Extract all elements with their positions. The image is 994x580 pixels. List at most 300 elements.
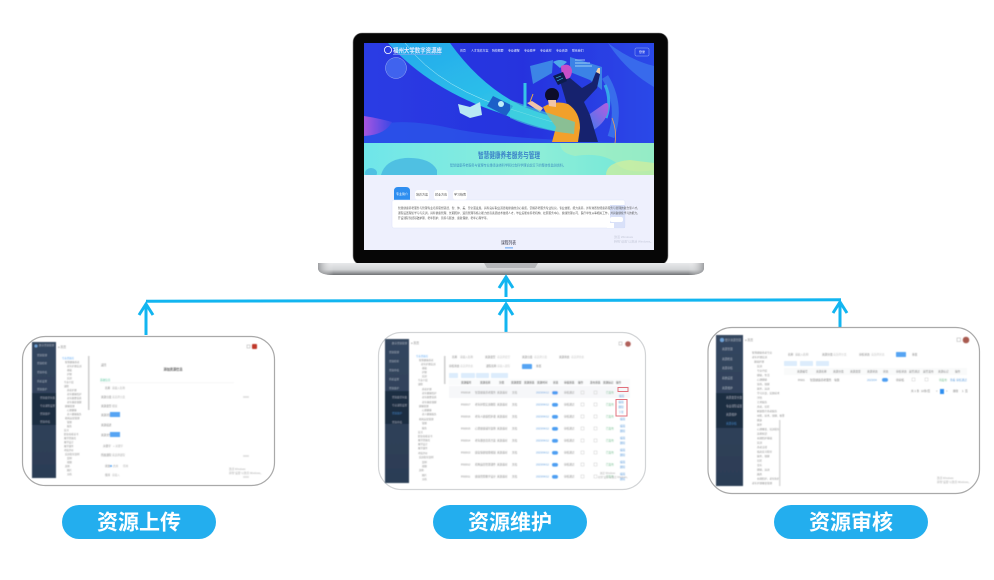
upload form: 返回 bbox=[101, 363, 107, 367]
directory tree: 教学设计 bbox=[418, 442, 428, 446]
directory tree: 营养、保健 bbox=[757, 382, 770, 386]
search filters: 资源分类 bbox=[522, 355, 533, 359]
navigation menu: 专业素材 bbox=[540, 48, 552, 52]
review table: 审核状态 bbox=[896, 370, 907, 374]
directory tree: 养老、社区 bbox=[757, 404, 770, 408]
table rows: 文档 bbox=[512, 474, 518, 478]
directory tree: 老年膳食营养 bbox=[67, 396, 82, 400]
upload form: 添加资源信息 bbox=[163, 366, 183, 372]
directory tree: 职业技能证书 bbox=[64, 432, 79, 436]
table rows: 审核通过 bbox=[564, 462, 575, 466]
search filters: 重置 bbox=[912, 352, 918, 356]
search filters: 请选择状态 bbox=[871, 352, 885, 356]
band subtitle: 智慧健康养老服务与管理专业秉承该类科学和社会科学理论前沿下的整体性监测资料。 bbox=[450, 162, 566, 168]
table rows: 文档 bbox=[512, 426, 518, 430]
panel: resource review bbox=[708, 328, 980, 494]
top bar: ≡ 首页 bbox=[745, 338, 753, 342]
table rows: 编辑 bbox=[620, 448, 626, 452]
upload form: 请输入 bbox=[112, 473, 120, 477]
directory tree: 图片 bbox=[422, 473, 427, 477]
directory tree: 教学资源库 bbox=[64, 436, 77, 440]
table rows: 已发布 bbox=[606, 438, 614, 442]
directory tree: 心理健康 bbox=[757, 378, 768, 382]
tabs: 就业方向 bbox=[435, 192, 447, 196]
table rows: 编辑 bbox=[618, 400, 624, 404]
connector arrows bbox=[139, 277, 847, 335]
table header: 审核状态 bbox=[564, 380, 575, 384]
directory tree: 教学课件 bbox=[64, 444, 74, 448]
table header bbox=[449, 379, 630, 385]
logo and site name: 福州大学数字资源库 bbox=[393, 46, 442, 54]
directory tree: 案例 bbox=[422, 460, 427, 464]
sidebar: 资源管理 bbox=[37, 353, 48, 357]
table rows: 资源素材 bbox=[497, 438, 508, 442]
directory tree: 艺术服务 bbox=[757, 400, 768, 404]
windows watermark: 转到"设置"以激活 Windows。 bbox=[229, 471, 263, 475]
directory tree: 社区 bbox=[757, 458, 763, 462]
introduction card: 开设课程包括基础护理、老年照护、营养与膳食、康复保健、老年心理学等。 bbox=[398, 216, 489, 220]
table rows: 删除 bbox=[620, 441, 626, 445]
table rows: 已发布 bbox=[606, 414, 614, 418]
directory tree: 实训 bbox=[757, 364, 763, 368]
search filters: 请选择状态 bbox=[571, 355, 584, 359]
upload form: 排序 bbox=[105, 473, 111, 477]
directory tree: 中医、技术、保健、推拿 bbox=[757, 414, 785, 418]
table rows: 审核通过 bbox=[564, 390, 575, 394]
search filters: 请选择类型 bbox=[497, 355, 510, 359]
arrow: resource maintenance lower bbox=[499, 304, 513, 335]
search filters: 名称 bbox=[788, 352, 794, 356]
tabs: 专业简介 bbox=[396, 191, 408, 196]
sidebar: 资源管理 bbox=[722, 347, 733, 351]
sidebar: 数字资源管理 bbox=[725, 338, 741, 342]
table rows: 删除 bbox=[618, 405, 624, 409]
laptop bbox=[318, 33, 704, 275]
upload form: 资源类型 bbox=[101, 404, 112, 408]
sidebar: 资源维护 bbox=[722, 386, 733, 390]
directory tree: 智慧健康养老专业 bbox=[752, 350, 773, 354]
search filters: 请输入名称 bbox=[460, 355, 473, 359]
table rows: 审核通过 bbox=[564, 402, 575, 406]
sidebar: 资源维护 bbox=[392, 411, 403, 415]
action buttons bbox=[449, 373, 508, 378]
sidebar: 系统设置 bbox=[722, 376, 733, 380]
upload form: + 关键字 bbox=[113, 444, 123, 448]
table rows: 2023/04/12 bbox=[536, 414, 550, 418]
table header: 资源类型 bbox=[511, 380, 522, 384]
review table: 资源编号 bbox=[797, 370, 808, 374]
pagination: 前往 bbox=[953, 389, 959, 393]
navigation menu: 联系我们 bbox=[572, 48, 584, 52]
introduction card bbox=[392, 200, 640, 228]
directory tree: 实训 bbox=[757, 440, 763, 444]
directory tree: 长期照护、老年防护 bbox=[757, 476, 780, 480]
search filters: 请选择分类 bbox=[534, 355, 547, 359]
directory tree: 管理 bbox=[422, 421, 427, 425]
band heading: 智慧健康养老服务与管理 bbox=[478, 150, 540, 160]
table rows: 资源素材 bbox=[497, 402, 508, 406]
sidebar: 资源管理 bbox=[389, 350, 400, 354]
login button: 登录 bbox=[639, 49, 645, 54]
top bar: ≡ 首页 bbox=[411, 341, 419, 345]
table rows: 2023/04/12 bbox=[536, 426, 550, 430]
hero banner bbox=[364, 43, 654, 143]
directory tree: 考核评价 bbox=[418, 451, 428, 455]
table rows bbox=[449, 386, 630, 481]
table rows: 资源素材 bbox=[497, 474, 508, 478]
sidebar: 资源维护 bbox=[726, 412, 737, 416]
directory tree: 实训指导案例 bbox=[419, 455, 434, 459]
directory tree: 管理 bbox=[67, 420, 72, 424]
directory tree: 图片 bbox=[67, 468, 72, 472]
sidebar: 资源维护 bbox=[37, 387, 48, 391]
directory tree: 老年康复保健 bbox=[422, 400, 437, 404]
search filters: 重置 bbox=[536, 364, 542, 368]
upload form: 基础信息 bbox=[100, 378, 111, 382]
sidebar: 专业课程设置 bbox=[392, 403, 408, 407]
directory tree: 老年康复保健 bbox=[67, 400, 82, 404]
table rows: 审核通过 bbox=[564, 438, 575, 442]
directory tree: 课程 bbox=[418, 382, 423, 386]
directory tree: 课程 bbox=[64, 384, 69, 388]
review table: 待审核 bbox=[896, 378, 904, 382]
windows watermark bbox=[614, 236, 652, 243]
search filters: 请输入名称 bbox=[795, 352, 809, 356]
table header: 资源标记 bbox=[603, 380, 614, 384]
panel: resource maintenance bbox=[378, 332, 646, 490]
windows watermark: 激活 Windows bbox=[229, 467, 246, 471]
upload form: 所属课程 bbox=[101, 453, 112, 457]
navigation menu: 人才培养方案 bbox=[471, 48, 488, 52]
directory tree: 考核评价 bbox=[64, 448, 74, 452]
directory tree: 视频 bbox=[67, 460, 72, 464]
sidebar: 数字资源管理 bbox=[39, 343, 55, 347]
windows watermark bbox=[229, 467, 263, 475]
directory tree: 老年护理实训 bbox=[67, 364, 82, 368]
introduction section background bbox=[364, 175, 654, 250]
navigation menu: 院校概要 bbox=[492, 48, 504, 52]
review table bbox=[784, 368, 967, 382]
tabs: 培养方案 bbox=[416, 192, 428, 196]
upload form: 请选择课程 bbox=[112, 453, 125, 457]
table rows: 心理健康辅导案例 bbox=[475, 426, 496, 430]
panel: resource upload bbox=[22, 336, 274, 486]
upload form: 资源描述 bbox=[101, 423, 112, 427]
upload form: 关键字 bbox=[103, 444, 111, 448]
translucent banner across figures bbox=[510, 100, 575, 134]
search filters: 资源状态 bbox=[559, 355, 570, 359]
table rows: RS0015 bbox=[461, 426, 471, 430]
table rows: 编辑 bbox=[620, 472, 626, 476]
table header: 状态 bbox=[553, 380, 559, 384]
sidebar bbox=[32, 342, 56, 478]
table rows: 资源素材 bbox=[497, 450, 508, 454]
sidebar: 数字资源管理 bbox=[392, 341, 408, 345]
action buttons bbox=[784, 361, 829, 366]
directory tree: 机构运营管理 bbox=[419, 417, 434, 421]
arrow: resource maintenance upper bbox=[499, 277, 513, 297]
directory tree: 老年健康照护 bbox=[67, 392, 82, 396]
upload form: 名称 bbox=[105, 386, 111, 390]
directory tree: 教学课件 bbox=[418, 446, 428, 450]
table rows: 已发布 bbox=[606, 474, 614, 478]
top bar bbox=[745, 337, 969, 343]
directory tree: 职业技能证书 bbox=[418, 434, 433, 438]
review table: 资源分类 bbox=[833, 370, 844, 374]
windows watermark: 转到"设置"以激活 Windows。 bbox=[937, 480, 971, 484]
directory tree: 长期照护基础 bbox=[757, 436, 773, 440]
sidebar: 系统设置 bbox=[37, 379, 48, 383]
directory tree: 健身 bbox=[757, 418, 763, 422]
label: resource upload bbox=[62, 505, 216, 539]
search filters bbox=[788, 352, 918, 357]
upload form: 资源分类 bbox=[101, 395, 112, 399]
table rows: 机构运营管理课件 bbox=[475, 462, 496, 466]
directory tree: 老年护理教育管理 bbox=[752, 481, 773, 485]
windows watermark: 激活 Windows bbox=[937, 476, 954, 480]
sidebar: 资源维护 bbox=[389, 386, 400, 390]
windows watermark: 激活 Windows bbox=[614, 234, 634, 239]
table rows: 已发布 bbox=[606, 450, 614, 454]
course list heading bbox=[501, 240, 516, 248]
upload form: 停用 bbox=[123, 464, 129, 468]
review table: 是否发布 bbox=[923, 370, 934, 374]
figure: seated person in orange hoodie bbox=[527, 88, 580, 142]
sidebar: 专业课程设置 bbox=[40, 404, 56, 408]
directory tree: 音乐 bbox=[757, 463, 763, 467]
table rows: 删除 bbox=[620, 477, 626, 481]
sidebar: 资源维护 bbox=[40, 412, 51, 416]
sidebar: 资源审核 bbox=[392, 420, 403, 424]
pagination: 1 bbox=[962, 389, 964, 393]
sidebar: 资源检索 bbox=[37, 361, 48, 365]
review table: 资源类型 bbox=[850, 370, 861, 374]
directory tree: 老年护理实训 bbox=[421, 362, 436, 366]
table rows: 康复保健技能视频 bbox=[475, 450, 496, 454]
review table: 资源标记 bbox=[938, 370, 949, 374]
upload screenshot bbox=[32, 342, 263, 478]
label: resource review bbox=[774, 505, 928, 539]
directory tree: 家庭医疗养老服务 bbox=[757, 409, 778, 413]
directory tree: 案例 bbox=[67, 456, 72, 460]
table header: 资源名称 bbox=[480, 380, 491, 384]
windows watermark: 激活 Windows bbox=[600, 471, 616, 475]
table rows: 智慧健康养老服务 bbox=[475, 390, 496, 394]
directory tree: 专业介绍 bbox=[418, 378, 428, 382]
table header: 资源状态 bbox=[524, 380, 535, 384]
table rows: 编辑 bbox=[620, 436, 626, 440]
directory tree: 心理健康 bbox=[422, 408, 432, 412]
directory tree: 专业资源库 bbox=[62, 356, 75, 360]
table rows: RS0017 bbox=[461, 402, 471, 406]
table rows: 审核通过 bbox=[564, 474, 575, 478]
navigation menu: 专业教学 bbox=[524, 48, 536, 52]
review table: 查看 审核通过 bbox=[950, 378, 967, 382]
search filters bbox=[449, 355, 584, 369]
top bar: ≡ 首页 bbox=[58, 345, 66, 349]
pagination: 页 bbox=[965, 389, 968, 393]
laptop screen bbox=[364, 43, 654, 250]
table rows: 已发布 bbox=[606, 426, 614, 430]
review table: 状态 bbox=[883, 370, 889, 374]
video card bbox=[487, 96, 513, 116]
review table: RS01 bbox=[798, 378, 805, 382]
review table: 智慧健康养老服务 bbox=[810, 378, 832, 382]
directory tree: 健康管理 bbox=[65, 404, 75, 408]
figure: standing person bbox=[553, 65, 600, 142]
pagination: > bbox=[946, 389, 948, 393]
red highlight boxes bbox=[616, 388, 628, 416]
search filters: 审核状态 bbox=[859, 352, 870, 356]
login button bbox=[635, 48, 649, 56]
sidebar bbox=[716, 335, 743, 486]
directory tree: 老年护理实训 bbox=[752, 355, 768, 359]
sidebar: 资源检索 bbox=[722, 357, 733, 361]
directory tree: 基础 bbox=[67, 368, 72, 372]
search filters: 审核状态 bbox=[449, 364, 460, 368]
directory tree: 康复、运动 bbox=[757, 386, 770, 390]
directory tree: 服务 bbox=[67, 424, 72, 428]
table rows: 删除 bbox=[620, 465, 626, 469]
directory tree: 心理教育、培训指导 bbox=[757, 427, 780, 431]
directory tree: 养老法律 bbox=[757, 445, 768, 449]
table rows: 资源素材 bbox=[497, 462, 508, 466]
sidebar: 系统设置 bbox=[389, 377, 400, 381]
navigation menu: 专业资源 bbox=[556, 48, 568, 52]
directory tree: 其他 bbox=[419, 468, 424, 472]
directory tree: 智慧健康养老 bbox=[419, 358, 434, 362]
directory tree: 实习 bbox=[418, 430, 423, 434]
sidebar: 资源类型分类 bbox=[392, 395, 408, 399]
logo and site name bbox=[384, 46, 442, 55]
table rows: 已发布 bbox=[606, 390, 614, 394]
table rows: 删除 bbox=[620, 453, 626, 457]
table header: 发布状态 bbox=[590, 380, 601, 384]
table rows: 2023/04/12 bbox=[536, 474, 550, 478]
directory tree: 视频 bbox=[422, 464, 427, 468]
teal swoosh bbox=[388, 43, 556, 131]
directory tree: 临床实习指导 bbox=[757, 450, 773, 454]
laptop lid bezel bbox=[353, 33, 668, 265]
upload form: 视频 bbox=[112, 404, 118, 408]
upload form: 资源封面 bbox=[101, 413, 112, 417]
search filters: 请选择分类 bbox=[833, 352, 847, 356]
table rows: 已发布 bbox=[606, 402, 614, 406]
sidebar: 资源审核 bbox=[722, 366, 733, 370]
directory tree: 实训指导案例 bbox=[65, 452, 80, 456]
table rows: RS0013 bbox=[461, 450, 471, 454]
directory tree: 护理 bbox=[422, 370, 427, 374]
introduction card: 课程设置理论学习与实训，具有健康管理、长期照护、运营管理等核心能力的高素质技术技能人才，毕业后能在养老机构、社区服务中心、健康管理公司、医疗单位从事相关工作，并具备继续学习的能力。 bbox=[398, 211, 640, 215]
review screenshot bbox=[716, 335, 971, 486]
table rows: 文档 bbox=[512, 450, 518, 454]
table header: 资源时间 bbox=[537, 380, 548, 384]
table rows: 编辑 bbox=[620, 424, 626, 428]
search filters: 资源类型 bbox=[485, 355, 496, 359]
sidebar: 资源类型分类 bbox=[726, 396, 742, 400]
search filters: 课程名称 bbox=[486, 364, 497, 368]
review table: 资源状态 bbox=[867, 370, 878, 374]
search filters: 资源分类 bbox=[822, 352, 833, 356]
arrow: resource upload bbox=[139, 304, 153, 335]
table rows: 审核通过 bbox=[564, 450, 575, 454]
navigation menu bbox=[460, 48, 584, 52]
search filters: 名称 bbox=[452, 355, 458, 359]
table rows: 2023/04/12 bbox=[536, 438, 550, 442]
table rows: RS0014 bbox=[461, 438, 471, 442]
directory tree: 康复、保健 bbox=[757, 454, 770, 458]
directory tree: 实训 bbox=[422, 374, 427, 378]
directory tree bbox=[62, 356, 90, 476]
directory tree: 老人健康服务 bbox=[67, 412, 82, 416]
directory tree: 教学资源库 bbox=[418, 438, 431, 442]
directory tree: 健康、生活 bbox=[757, 373, 770, 377]
directory tree: 护理 bbox=[67, 372, 72, 376]
windows watermark bbox=[937, 476, 971, 484]
table header: 分类 bbox=[499, 380, 505, 384]
table rows: 2023/04/12 bbox=[536, 390, 550, 394]
table rows: 资源素材 bbox=[497, 414, 508, 418]
directory tree: 急救知识 bbox=[757, 432, 768, 436]
windows watermark: 转到"设置"以激活 Windows。 bbox=[614, 238, 653, 244]
table rows: 文档 bbox=[512, 414, 518, 418]
table rows: 文档 bbox=[512, 390, 518, 394]
pagination: < bbox=[936, 389, 938, 393]
table rows: 文档 bbox=[512, 438, 518, 442]
sidebar: 资源审核 bbox=[726, 422, 737, 426]
laptop base bbox=[318, 263, 704, 275]
table rows: 资源素材 bbox=[497, 390, 508, 394]
table rows: 文档 bbox=[512, 462, 518, 466]
directory tree: 老年健康照护 bbox=[422, 391, 437, 395]
upload form bbox=[100, 363, 249, 478]
sidebar: 资源检索 bbox=[389, 359, 400, 363]
table rows: RS0012 bbox=[461, 462, 471, 466]
directory tree: 评估 bbox=[757, 396, 763, 400]
directory tree: 基础 bbox=[422, 366, 427, 370]
pagination: 10条/页 bbox=[921, 389, 930, 393]
directory tree: 文档 bbox=[67, 472, 72, 476]
table header: 资源编号 bbox=[461, 380, 472, 384]
table rows: 审核通过 bbox=[564, 426, 575, 430]
sidebar: 资源审核 bbox=[37, 370, 48, 374]
review table: 待发布 bbox=[939, 378, 947, 382]
label: resource maintenance: 资源维护 bbox=[468, 512, 552, 534]
pagination bbox=[911, 389, 968, 394]
top bar bbox=[411, 341, 631, 347]
directory tree: 心理健康 bbox=[67, 408, 77, 412]
upload form: 启用 bbox=[113, 464, 119, 468]
search filters: 请选择状态 bbox=[460, 364, 473, 368]
directory tree: 养老护理 bbox=[422, 387, 432, 391]
label: resource upload: 资源上传 bbox=[97, 512, 181, 534]
directory tree: 机构运营管理 bbox=[65, 416, 80, 420]
table rows: RS0016 bbox=[461, 414, 471, 418]
navigation menu: 专业课程 bbox=[508, 48, 520, 52]
search filters: 请输入课程 bbox=[497, 364, 510, 368]
table rows: 编辑 bbox=[619, 394, 625, 398]
sidebar: 资源审核 bbox=[389, 368, 400, 372]
directory tree: 专业介绍 bbox=[757, 368, 768, 372]
course list heading: 课程列表 bbox=[501, 240, 516, 246]
review table: 资源名称 bbox=[816, 370, 827, 374]
table rows: RS0018 bbox=[461, 390, 471, 394]
sidebar bbox=[385, 339, 409, 483]
table rows: 资源素材 bbox=[497, 426, 508, 430]
horizontal connector bbox=[146, 300, 841, 301]
directory tree: 学习方案、实践技术 bbox=[757, 391, 780, 395]
review table: 操作 bbox=[955, 370, 961, 374]
